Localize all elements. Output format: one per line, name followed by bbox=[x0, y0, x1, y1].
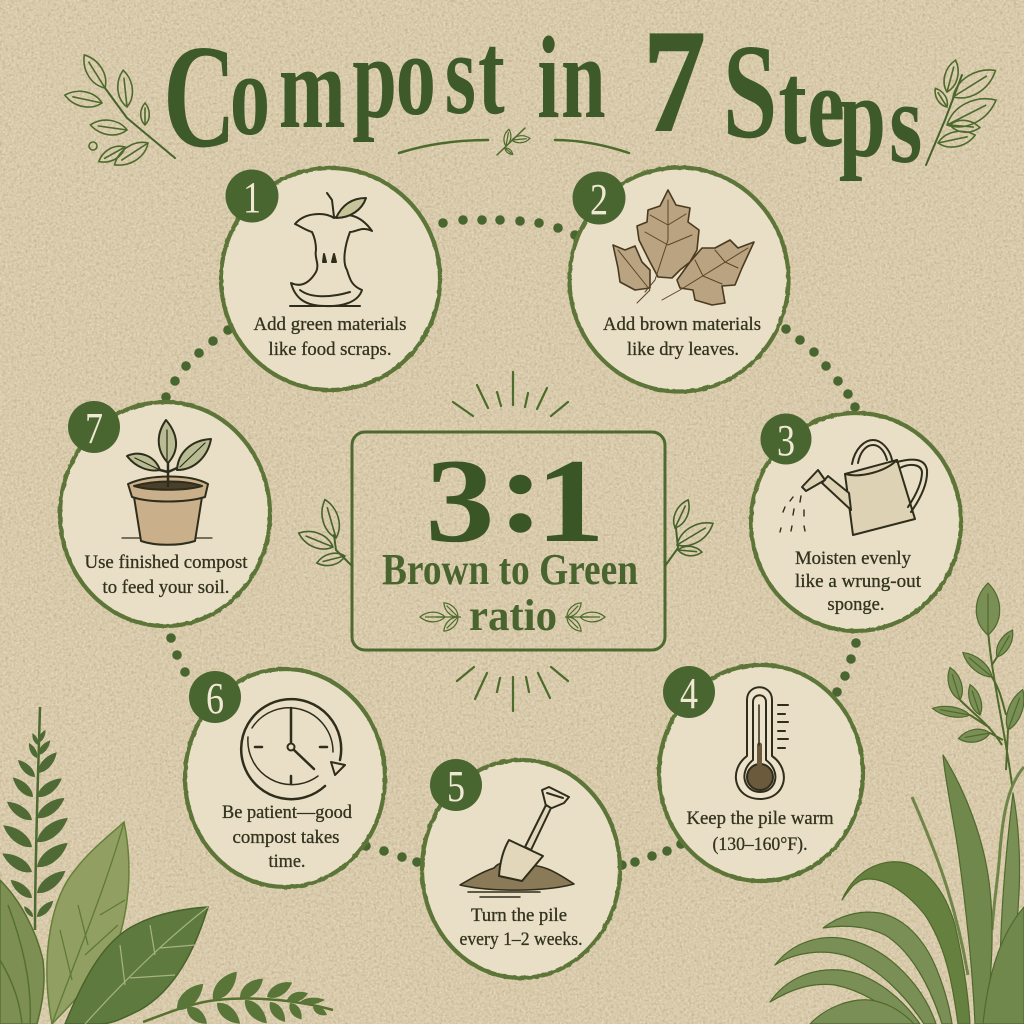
icon: dry leaves bbox=[613, 190, 754, 305]
step 6 badge: 6 bbox=[206, 674, 224, 723]
step 7 text bbox=[84, 553, 248, 598]
step 7 text: to feed your soil. bbox=[102, 578, 230, 598]
step 7 badge bbox=[68, 401, 120, 453]
title: in bbox=[524, 12, 606, 143]
rays above and below panel bbox=[453, 372, 568, 711]
step 5 text bbox=[460, 906, 582, 950]
step 6 text: Be patient—good bbox=[222, 803, 353, 823]
step 5 badge bbox=[430, 759, 482, 811]
title: S bbox=[723, 15, 777, 167]
step 5 text: every 1–2 weeks. bbox=[460, 930, 582, 950]
ratio caption: Brown to Green bbox=[382, 545, 638, 594]
central panel frame bbox=[352, 432, 665, 650]
step 3 text: Moisten evenly bbox=[795, 549, 912, 569]
dark large leaf bbox=[65, 907, 208, 1024]
ratio sublabel: ratio bbox=[469, 591, 557, 640]
step 1 text: Add green materials bbox=[254, 315, 406, 335]
icon: clock bbox=[241, 699, 345, 799]
botanical corner left bbox=[0, 707, 333, 1024]
step 3 badge bbox=[760, 414, 812, 465]
left large leaf bbox=[0, 880, 44, 1024]
step 4 badge: 4 bbox=[680, 669, 698, 718]
step 1 text bbox=[254, 315, 406, 360]
step 2 badge: 2 bbox=[590, 175, 608, 224]
title: 7 bbox=[643, 1, 706, 162]
ratio number: 3:1 bbox=[425, 424, 605, 567]
step 1 badge: 1 bbox=[243, 173, 261, 222]
step 3 text: like a wrung-out bbox=[795, 572, 922, 592]
step 7 bbox=[60, 401, 270, 626]
icon: thermometer bbox=[736, 687, 788, 799]
title underline ornament bbox=[399, 128, 629, 156]
step 3 badge: 3 bbox=[777, 416, 795, 465]
step 2 text: Add brown materials bbox=[603, 315, 761, 335]
title: C bbox=[163, 15, 236, 179]
step 6 text bbox=[222, 803, 353, 872]
step 3 bbox=[751, 413, 961, 631]
step 3 text bbox=[795, 549, 922, 615]
light large leaf bbox=[47, 822, 129, 1024]
step 1 bbox=[221, 168, 440, 390]
step 2 badge bbox=[572, 172, 626, 224]
step 7 badge: 7 bbox=[85, 404, 103, 453]
step 2 bbox=[570, 168, 788, 392]
step 5 bbox=[422, 759, 620, 978]
grass blades bbox=[770, 755, 1024, 1024]
fern bbox=[0, 707, 72, 930]
step 2 text: like dry leaves. bbox=[627, 340, 739, 360]
step 5 badge: 5 bbox=[447, 762, 465, 811]
step 2 text bbox=[603, 315, 761, 360]
step 4 badge bbox=[663, 666, 715, 718]
botanical corner right bbox=[770, 583, 1024, 1024]
step 4 text bbox=[686, 809, 834, 855]
step 4 bbox=[659, 665, 863, 881]
title: teps bbox=[778, 39, 922, 188]
title sprig right bbox=[926, 58, 1001, 165]
step 1 text: like food scraps. bbox=[268, 340, 392, 360]
title sprig left bbox=[63, 51, 175, 171]
dotted path connecting steps bbox=[161, 215, 861, 870]
icon: potted plant bbox=[122, 420, 212, 545]
step 7 text: Use finished compost bbox=[84, 553, 248, 573]
icon: apple core bbox=[290, 193, 372, 306]
flowering stalk bbox=[932, 583, 1024, 785]
step 6 text: time. bbox=[268, 852, 306, 872]
step 6 bbox=[185, 669, 385, 887]
title bbox=[163, 1, 922, 188]
small sprigs beside ratio bbox=[420, 600, 605, 634]
title: ompost bbox=[230, 8, 505, 160]
step 6 badge bbox=[189, 671, 241, 723]
central ratio panel bbox=[352, 424, 665, 650]
step 4 text: (130–160°F). bbox=[712, 835, 808, 855]
step 5 text: Turn the pile bbox=[471, 906, 567, 926]
step 1 badge bbox=[226, 170, 278, 222]
step 6 text: compost takes bbox=[232, 828, 340, 848]
lower branch bbox=[143, 967, 333, 1024]
step 3 text: sponge. bbox=[828, 595, 884, 615]
center side sprigs bbox=[296, 497, 717, 569]
icon: watering can bbox=[780, 440, 927, 535]
step 4 text: Keep the pile warm bbox=[686, 809, 834, 829]
icon: shovel in soil bbox=[460, 787, 574, 897]
